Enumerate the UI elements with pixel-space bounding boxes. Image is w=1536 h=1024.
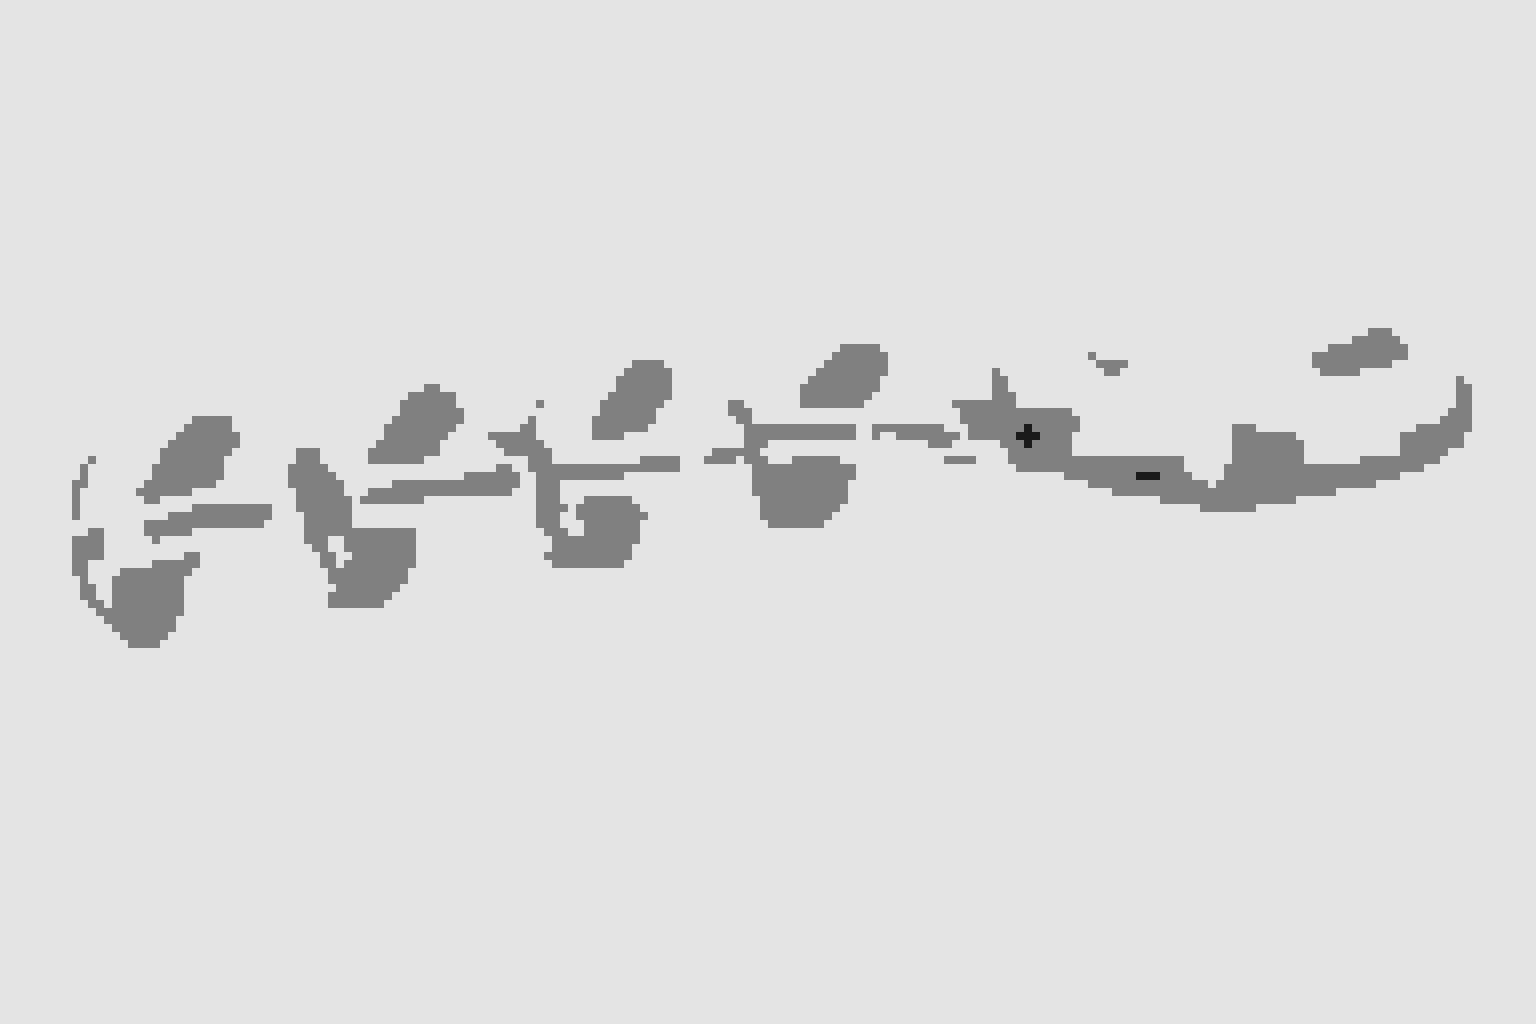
lower blob 1 xyxy=(72,528,200,648)
round blob 3 xyxy=(544,496,648,568)
silhouette group 5: central and right shapes xyxy=(872,328,1472,512)
body shape 2 xyxy=(288,448,416,608)
leaf shape 4 xyxy=(800,344,888,408)
icon: minus sign xyxy=(1136,472,1160,480)
leaf shape 1 xyxy=(136,416,240,504)
silhouette group 2 xyxy=(288,384,520,608)
thin arc 1 xyxy=(72,456,96,520)
branching stem 4 xyxy=(704,400,856,464)
top-right cloud shape xyxy=(1312,328,1408,376)
main long landmass xyxy=(952,368,1472,512)
round blob 4 xyxy=(752,456,856,528)
leaf shape 3 xyxy=(592,360,672,440)
bar 2 xyxy=(360,464,520,504)
silhouette group 1: far-left shapes xyxy=(72,416,272,648)
bar 1 xyxy=(144,504,272,544)
small dot 3 xyxy=(536,400,544,408)
thin strip 5 xyxy=(872,424,960,448)
small wedge 5 xyxy=(1088,352,1128,376)
leaf shape 2 xyxy=(368,384,464,464)
branching stem 3 xyxy=(488,416,680,536)
icon: plus sign xyxy=(1016,424,1040,448)
silhouette group 4 xyxy=(704,344,888,528)
silhouette group 3 xyxy=(488,360,680,568)
short dash 5 xyxy=(944,456,976,464)
